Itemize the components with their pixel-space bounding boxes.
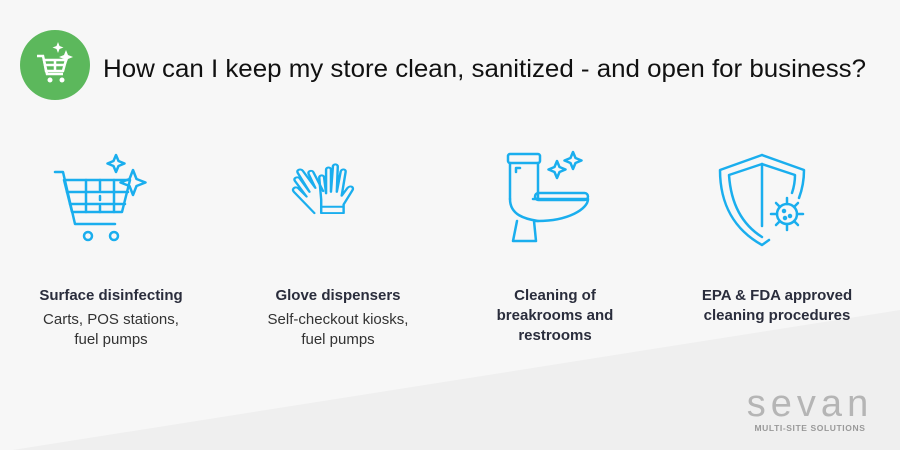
logo: sevan: sevan: [747, 383, 873, 425]
panel: surface disinfecting: [39, 287, 183, 348]
panel: glove dispensers: Glove dispensers: [275, 287, 401, 304]
title: How can I keep my store clean, sanitized - and open for business?: [103, 55, 866, 83]
panel: glove dispensers: [268, 287, 408, 348]
panel: glove dispensers: fuel pumps: [301, 331, 375, 348]
panel: cleaning: breakrooms and: [497, 307, 613, 324]
panel: surface disinfecting: fuel pumps: [74, 331, 148, 348]
panel: glove dispensers: Self-checkout kiosks,: [268, 311, 408, 328]
icon: header cart badge: [20, 30, 90, 100]
panel: surface disinfecting: Carts, POS stations,: [43, 311, 179, 328]
panel: cleaning: [497, 287, 613, 344]
logo: sevan: MULTI-SITE SOLUTIONS: [754, 423, 866, 433]
icon: toilet: [506, 150, 590, 242]
panel: EPA FDA: [702, 287, 852, 324]
panel: cleaning: Cleaning of: [514, 287, 596, 304]
panel: EPA FDA: EPA & FDA approved: [702, 287, 852, 304]
icon: shield virus: [718, 154, 806, 246]
icon: cart sparkle: [54, 154, 147, 242]
panel: EPA FDA: cleaning procedures: [704, 307, 850, 324]
panel: cleaning: restrooms: [518, 327, 592, 344]
icon: gloves: [292, 163, 354, 214]
panel: surface disinfecting: Surface disinfecting: [39, 287, 183, 304]
